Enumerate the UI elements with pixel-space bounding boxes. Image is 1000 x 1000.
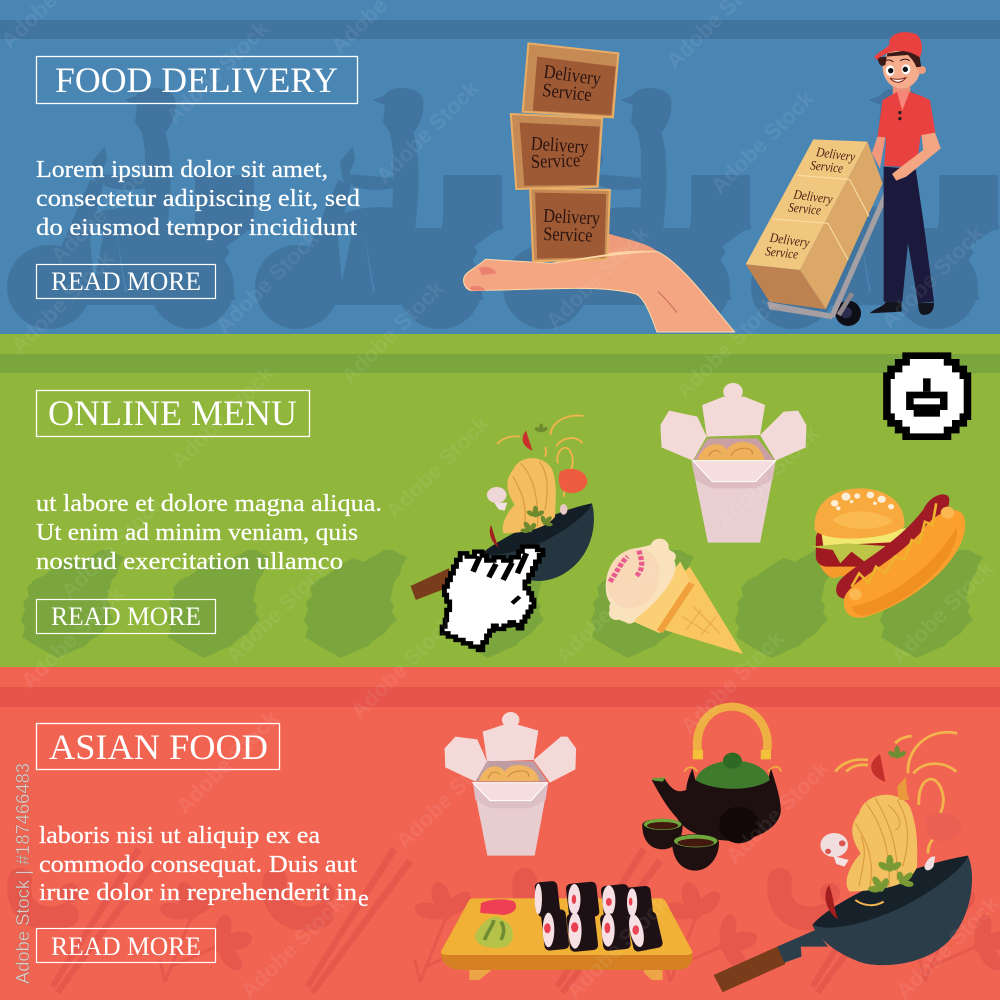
watermarks: Adobe Stock [171,705,284,819]
text block: food delivery: Lorem ipsum dolor sit amet, [36,157,328,183]
icon: burger [810,488,906,578]
side credit: stock id: Adobe Stock | #187466483 [12,763,33,984]
text block: asian food [39,823,369,912]
icon: teapot with handle [652,707,781,843]
text block: asian food: laboris nisi ut aliquip ex ea [39,823,320,849]
watermarks: Adobe Stock [706,85,819,199]
icon: thumb [605,233,660,255]
icon: middle box [511,114,602,189]
icon: stacked parcels: Service [788,199,822,218]
icon: middle box: Service [531,150,581,173]
icon: stacked parcels: Delivery [814,144,856,164]
watermarks: Adobe Stock [161,15,274,129]
watermarks: Adobe Stock [876,220,989,334]
text block: food delivery [36,157,360,241]
button: read more food delivery: READ MORE [51,267,201,296]
text block: food delivery: do eiusmod tempor incididunt [36,215,357,241]
icon: stacked parcels [746,139,883,309]
icon: sushi tray [441,898,692,980]
button: read more asian food: READ MORE [51,932,201,961]
icon: hand truck [767,173,895,326]
icon: top box: Service [541,80,593,106]
icon: tea cups [642,819,719,871]
icon: stacked parcels: Service [765,243,799,262]
text block: asian food: commodo consequat. Duis aut [39,852,357,878]
icon: stacked parcels: Delivery [792,186,834,207]
watermarks: Adobe Stock [211,225,324,339]
watermarks: Adobe Stock [16,580,129,694]
watermarks: Adobe Stock [551,555,664,669]
icon: pixel loading glyph [887,356,967,437]
heading: food delivery: FOOD DELIVERY [55,60,338,100]
icon: stacked parcels: Service [810,157,844,176]
watermarks: Adobe Stock [336,275,449,389]
text block: food delivery: consectetur adipiscing elit, sed [36,186,360,212]
icon: courier [870,32,941,315]
text block: online menu: nostrud exercitation ullamco [36,549,343,575]
icon: hand [464,251,735,332]
icon: wok with noodles [411,416,594,600]
icon: bottom box [530,188,610,261]
icon: sushi rolls [534,881,664,952]
icon: ice cream cone [600,539,743,654]
icon: pixel hand cursor [442,547,543,650]
watermarks: Adobe Stock [46,155,159,269]
illustration: hand holding delivery boxes [464,43,735,332]
watermarks: Adobe Stock [371,75,484,189]
heading: asian food: ASIAN FOOD [49,727,268,767]
icon: top box [523,43,618,117]
text block: asian food: irure dolor in reprehenderit in [39,880,357,906]
panel: asian food background [0,667,1000,1000]
icon: bottom box: Service [543,224,593,247]
watermarks: Adobe Stock [6,245,119,359]
text block: online menu: ut labore et dolore magna aliqua. [36,491,382,517]
icon: wok with noodles [714,732,972,992]
panel: online menu background [0,334,1000,667]
watermarks: Adobe Stock [166,360,279,474]
text block: online menu [36,491,382,575]
illustrations: online menu food [411,356,967,654]
watermarks: Adobe Stock [221,555,334,669]
panel: food delivery background [0,0,1000,334]
heading: online menu: ONLINE MENU [48,393,297,433]
watermarks: Adobe Stock [676,625,789,739]
watermarks: Adobe Stock [391,740,504,854]
icon: middle box: Delivery [530,133,589,158]
icon: takeaway box [445,712,576,856]
icon: takeaway box [660,383,806,543]
illustrations: asian food [441,707,972,992]
illustration: courier with hand truck [746,32,941,326]
watermarks: Adobe Stock [381,410,494,524]
icon: top box: Delivery [542,62,602,90]
watermarks: Adobe Stock [721,755,834,869]
watermarks: Adobe Stock [346,610,459,724]
icon: stacked parcels: Delivery [768,230,811,250]
icon: bottom box: Delivery [543,206,601,230]
watermarks: Adobe Stock [711,420,824,534]
icon: hot dog [836,494,965,618]
watermarks: Adobe Stock [671,290,784,404]
watermarks: Adobe Stock [886,555,999,669]
text block: asian food: e [358,886,369,912]
watermarks: Adobe Stock [56,490,169,604]
button: read more online menu: READ MORE [51,602,201,631]
watermarks: Adobe Stock [541,220,654,334]
text block: online menu: Ut enim ad minim veniam, quis [36,520,358,546]
